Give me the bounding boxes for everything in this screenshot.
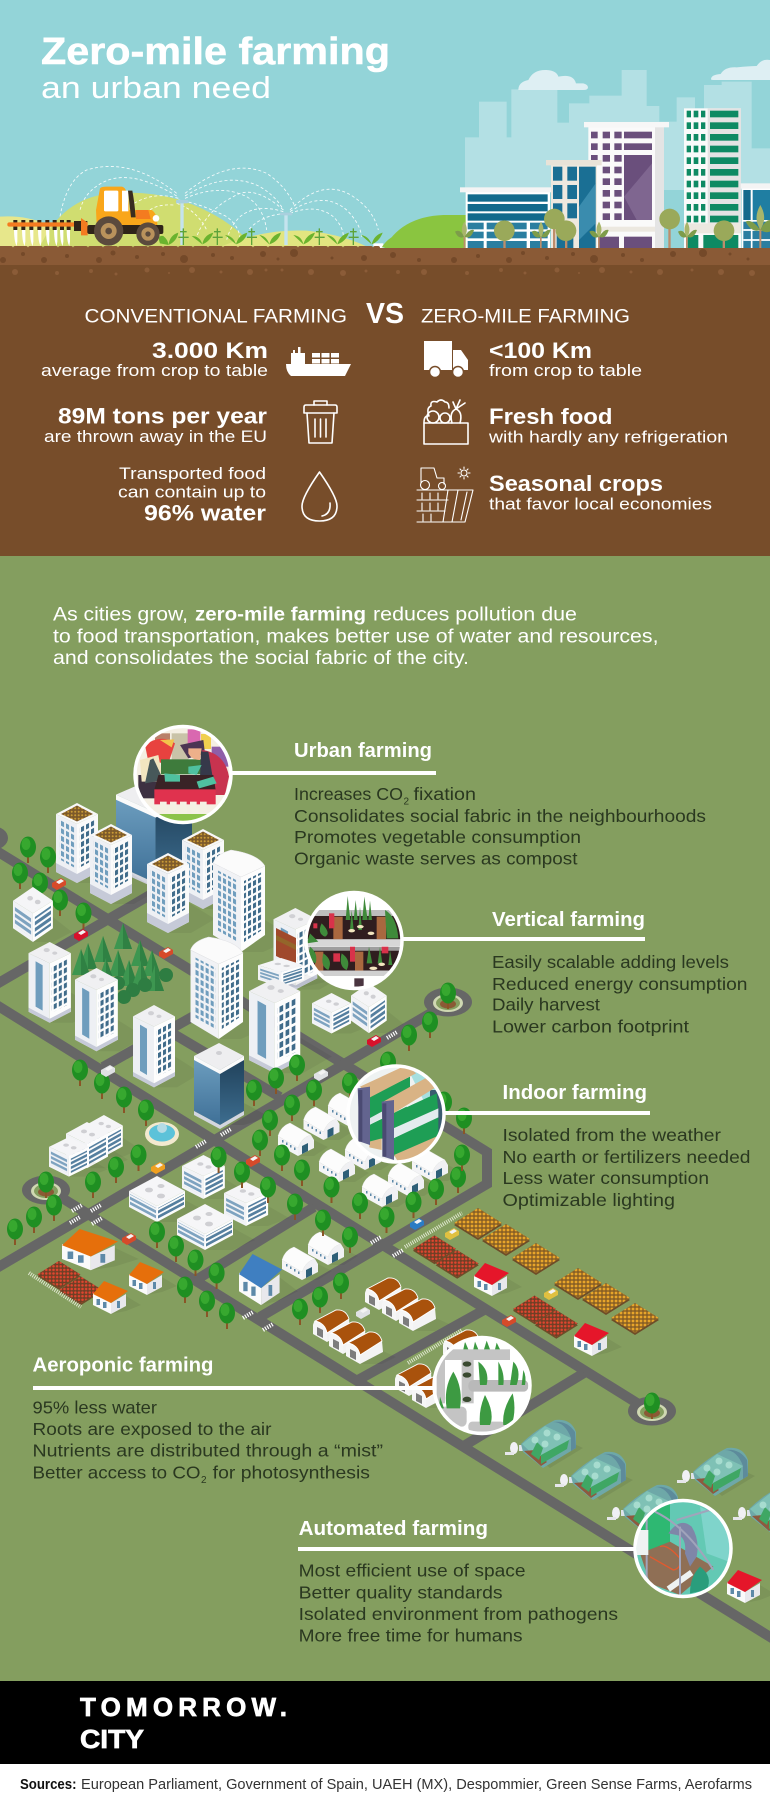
road network xyxy=(0,850,770,1640)
sources: European Parliament, Government of Spain, UAEH (MX), Despommier, Green Sense Farms, Aerofarms xyxy=(81,1776,752,1793)
aeroponic farming list: Roots are exposed to the air xyxy=(32,1419,272,1439)
urban farming list xyxy=(294,784,706,868)
urban farming list: 2 xyxy=(404,796,410,808)
stat: <100 Km xyxy=(489,338,642,380)
fountain xyxy=(145,1122,179,1146)
icon: water drop xyxy=(302,472,337,521)
sources: Sources: xyxy=(20,1776,76,1793)
tractor implement xyxy=(7,218,88,246)
stat: 89M tons: are thrown away in the EU xyxy=(44,427,267,446)
footer band xyxy=(0,1681,770,1764)
skyline silhouette xyxy=(465,70,770,190)
urban farming list: Increases CO xyxy=(294,784,403,804)
towers: mid block xyxy=(28,937,404,1129)
aeroponic farming list: 95% less water xyxy=(32,1398,157,1418)
aeroponic farming list: Better access to CO xyxy=(32,1462,200,1482)
indoor farming list: Less water consumption xyxy=(502,1168,709,1188)
automated farming list xyxy=(299,1560,618,1646)
urban farming list: Promotes vegetable consumption xyxy=(294,827,581,847)
section: urban farming xyxy=(135,726,706,868)
illustration: tractor field with sprinklers xyxy=(0,166,400,250)
section: aeroponic farming xyxy=(32,1338,530,1486)
low blue building xyxy=(460,187,553,248)
roundabouts xyxy=(22,988,676,1426)
illustration: city skyline xyxy=(383,60,770,250)
greenhouses xyxy=(505,1420,770,1533)
stat: seasonal crops: that favor local economies xyxy=(489,494,712,514)
title: an urban need xyxy=(41,70,271,105)
logo: Tomorrow.City: CITY xyxy=(80,1724,144,1754)
aeroponic farming list: 2 xyxy=(201,1475,207,1486)
comparison headings xyxy=(84,298,630,330)
vertical farming leader line xyxy=(403,937,645,941)
vehicles xyxy=(52,878,558,1327)
stat: fresh food: with hardly any refrigeration xyxy=(488,428,728,446)
intro paragraph: reduces pollution due xyxy=(373,604,577,626)
intro paragraph: As cities grow, xyxy=(53,604,188,626)
intro paragraph xyxy=(53,604,658,669)
crosswalks xyxy=(70,1032,403,1330)
office complex xyxy=(49,1115,141,1177)
low offices xyxy=(129,1155,289,1250)
aeroponic farming list xyxy=(32,1398,383,1486)
indoor farming list: Optimizable lighting xyxy=(502,1190,675,1210)
icon: seasonal crops xyxy=(417,467,473,522)
stat: 96% water: can contain up to xyxy=(118,482,266,502)
aeroponic farming leader line xyxy=(33,1386,433,1390)
icon: ship xyxy=(286,347,351,376)
stat: seasonal crops: Seasonal crops xyxy=(489,471,663,496)
section: indoor farming xyxy=(348,1065,750,1210)
barns xyxy=(313,1278,493,1408)
urban farming circle illustration xyxy=(135,726,231,824)
comparison headings: CONVENTIONAL FARMING xyxy=(84,306,347,328)
trees: lower streets xyxy=(7,982,660,1419)
stat: 3.000 Km xyxy=(41,338,268,380)
automated farming list: More free time for humans xyxy=(299,1626,523,1646)
icon: trash bin xyxy=(304,401,337,443)
vertical farming list: Reduced energy consumption xyxy=(492,974,748,994)
indoor farming list: Isolated from the weather xyxy=(502,1125,721,1145)
urban farming list: Consolidates social fabric in the neighbourhoods xyxy=(294,806,706,826)
aeroponic farming list: Nutrients are distributed through a “mist” xyxy=(32,1440,383,1460)
urban farming heading: Urban farming xyxy=(294,740,432,762)
isometric city map xyxy=(0,778,770,1640)
right building xyxy=(741,183,770,248)
vertical farming circle illustration xyxy=(305,892,403,988)
aeroponic farming heading: Aeroponic farming xyxy=(32,1354,214,1376)
icon: crate of vegetables xyxy=(424,400,468,444)
aeroponic farming list: for photosynthesis xyxy=(213,1462,370,1482)
stat: 89M tons xyxy=(44,404,267,446)
indoor farming leader line xyxy=(444,1111,650,1115)
urban farming list: Organic waste serves as compost xyxy=(294,848,578,868)
stat: fresh food xyxy=(488,404,728,446)
pine park xyxy=(72,923,173,1004)
title: Zero-mile farming xyxy=(41,31,390,73)
automated farming heading: Automated farming xyxy=(299,1518,488,1540)
tractor xyxy=(87,187,163,246)
urban farming leader line xyxy=(231,771,436,775)
indoor farming heading: Indoor farming xyxy=(502,1082,647,1104)
vertical farming list: Daily harvest xyxy=(492,994,600,1014)
comparison headings: ZERO-MILE FARMING xyxy=(421,306,630,328)
vertical farming heading: Vertical farming xyxy=(492,909,645,931)
stat: <100 Km: <100 Km xyxy=(489,338,592,363)
trees: upper left xyxy=(12,836,92,929)
clouds xyxy=(518,60,770,90)
stat: 3.000 Km: 3.000 Km xyxy=(152,338,268,363)
vertical farming list: Easily scalable adding levels xyxy=(492,952,729,972)
purple building xyxy=(584,122,669,248)
title xyxy=(41,31,390,105)
urban farming list: fixation xyxy=(414,784,476,804)
vertical farming list xyxy=(492,952,748,1036)
quonset cluster xyxy=(278,1093,462,1280)
fences xyxy=(29,1213,462,1363)
automated farming list: Most efficient use of space xyxy=(299,1560,526,1580)
indoor farming list xyxy=(502,1125,750,1210)
soil band xyxy=(0,248,770,557)
stat: 96% water: Transported food xyxy=(119,464,266,483)
stat: seasonal crops xyxy=(489,471,712,514)
vertical farming list: Lower carbon footprint xyxy=(492,1016,689,1036)
automated farming leader line xyxy=(298,1547,635,1551)
stat: fresh food: Fresh food xyxy=(489,404,612,429)
logo: Tomorrow.City xyxy=(80,1692,287,1754)
green hill xyxy=(383,215,470,250)
trees: mid streets xyxy=(72,1012,438,1156)
automated farming circle illustration xyxy=(633,1500,733,1600)
street trees xyxy=(455,205,770,248)
icon: truck xyxy=(424,341,468,378)
stat: 3.000 Km: average from crop to table xyxy=(41,361,268,380)
intro paragraph: zero-mile farming xyxy=(195,604,366,626)
aeroponic farming circle illustration xyxy=(433,1338,530,1434)
comparison headings: VS xyxy=(366,298,404,330)
green tower xyxy=(684,108,741,248)
tower with green wall xyxy=(274,908,344,990)
logo: Tomorrow.City: TOMORROW. xyxy=(80,1692,287,1722)
sky background xyxy=(0,0,770,248)
stat: 96% water: 96% water xyxy=(144,500,266,526)
intro paragraph: to food transportation, makes better use of water and resources, xyxy=(53,626,658,648)
intro paragraph: and consolidates the social fabric of the city. xyxy=(53,648,469,669)
section: automated farming xyxy=(298,1500,733,1646)
towers: top block xyxy=(13,778,295,952)
stat: 89M tons: 89M tons per year xyxy=(58,404,267,428)
green city background xyxy=(0,556,770,1681)
automated farming list: Better quality standards xyxy=(299,1582,503,1602)
stat: <100 Km: from crop to table xyxy=(489,361,642,380)
indoor farming list: No earth or fertilizers needed xyxy=(502,1147,750,1167)
stat: 96% water xyxy=(118,464,266,526)
crop fields xyxy=(37,1208,659,1339)
mid teal building xyxy=(546,160,602,248)
indoor farming circle illustration xyxy=(348,1065,447,1165)
section: vertical farming xyxy=(305,892,748,1036)
houses xyxy=(62,1229,770,1603)
automated farming list: Isolated environment from pathogens xyxy=(299,1604,618,1624)
